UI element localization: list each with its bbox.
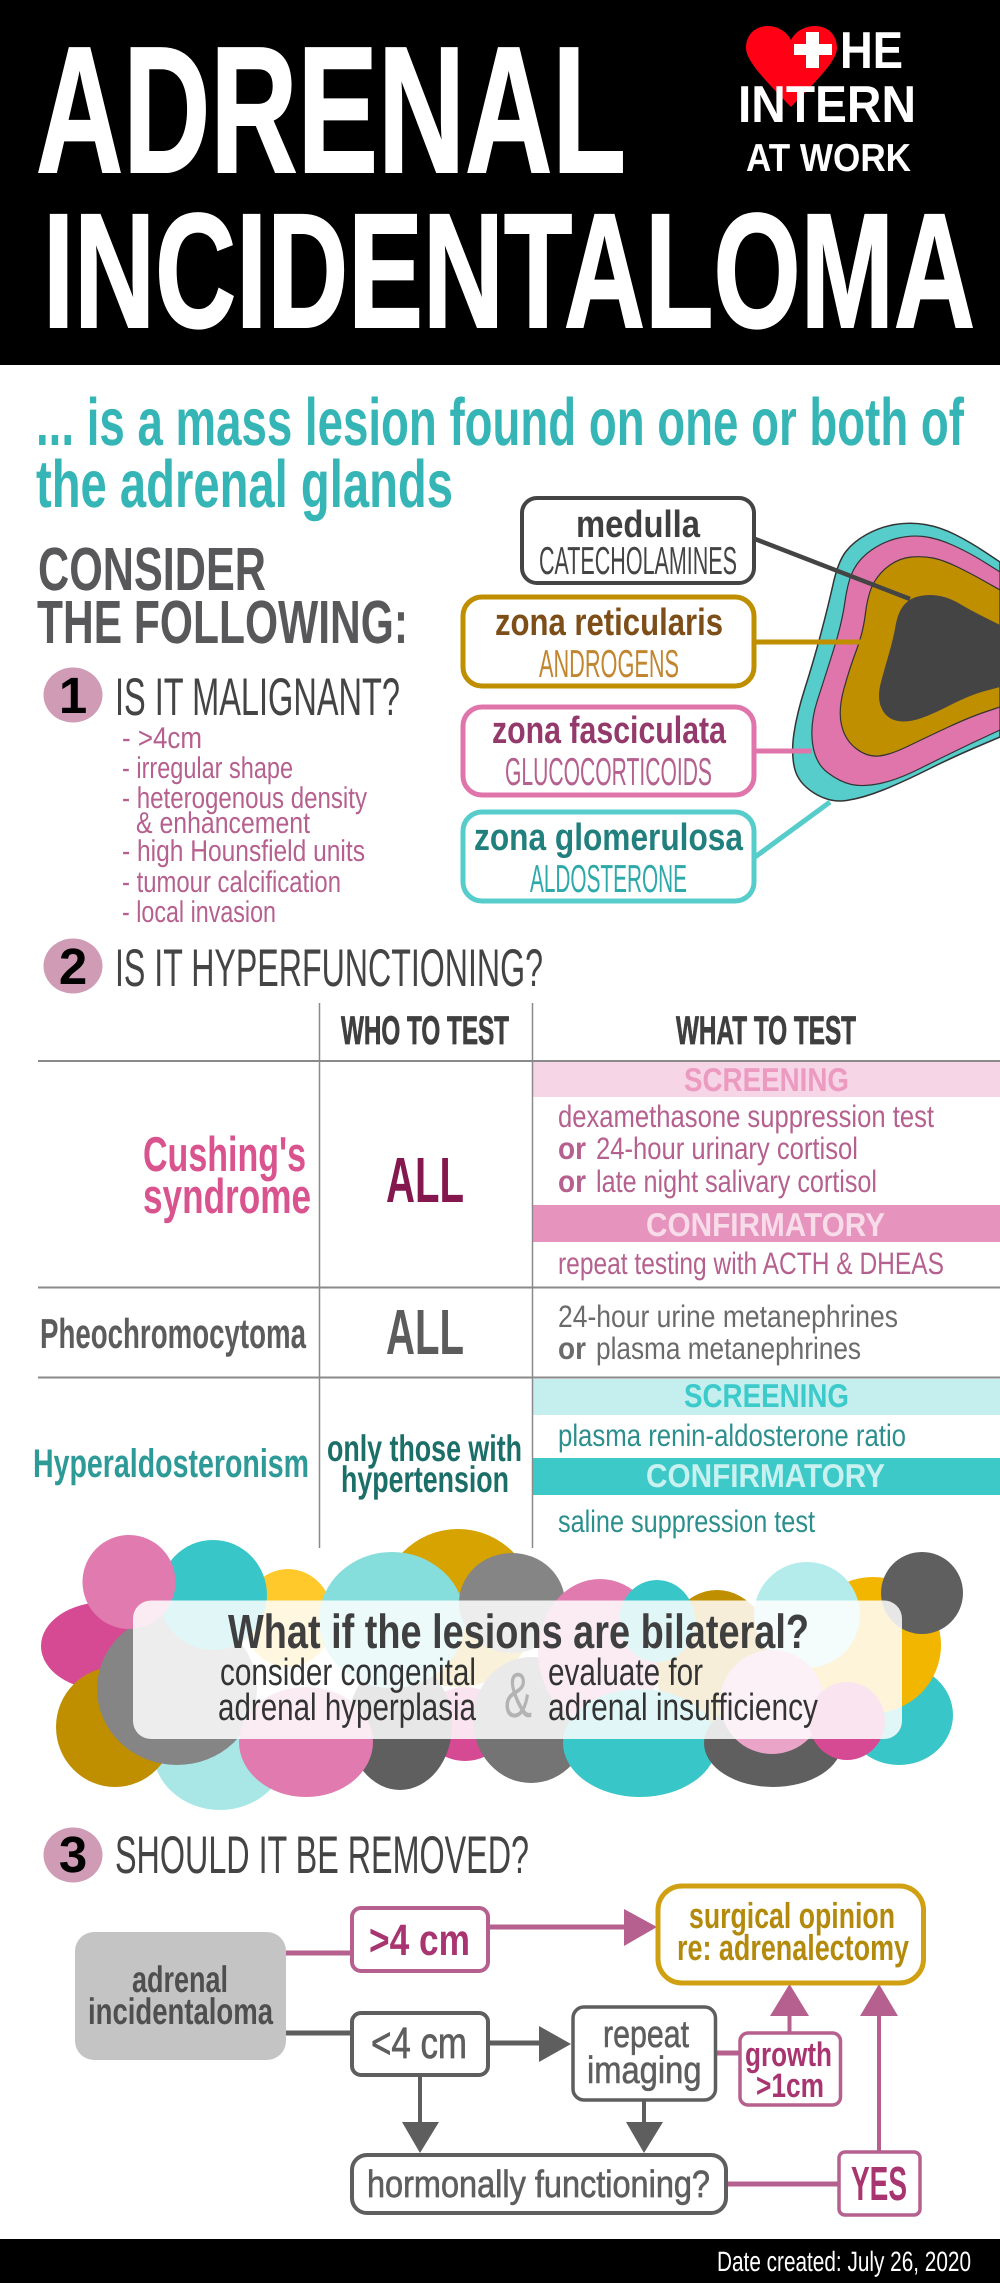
callout: zona glomerulosa: zona glomerulosa	[474, 817, 744, 859]
column headers: WHO TO TEST	[341, 1009, 509, 1053]
row: hyperaldosteronism: only those with	[327, 1428, 522, 1469]
node: surgical opinion	[658, 1886, 924, 1983]
node: greater than 4 cm	[352, 1908, 488, 1971]
node: hormonally functioning	[352, 2155, 726, 2213]
row: cushing's syndrome: or	[558, 1131, 586, 1166]
node: adrenal incidentaloma	[75, 1932, 286, 2060]
section 1: is it malignant	[44, 667, 400, 929]
node: greater than 4 cm: >4 cm	[369, 1916, 470, 1965]
malignancy criteria list: - high Hounsfield units	[122, 835, 365, 868]
logo: the intern at work	[738, 22, 916, 180]
row: hyperaldosteronism: hypertension	[341, 1459, 509, 1500]
logo: the intern at work: INTERN	[738, 76, 916, 134]
callout: zona fasciculata	[463, 707, 812, 795]
section 2 heading: is it hyperfunctioning: 2	[59, 938, 87, 995]
bilateral advice: &	[504, 1659, 532, 1731]
row: cushing's syndrome: CONFIRMATORY	[646, 1206, 885, 1243]
heading: consider the following: CONSIDER	[38, 535, 266, 603]
section 3 heading: should it be removed: 3	[59, 1826, 87, 1883]
section 2 heading: is it hyperfunctioning	[44, 938, 543, 998]
node: repeat imaging	[573, 2007, 716, 2100]
malignancy criteria list: - irregular shape	[122, 752, 293, 785]
callout: zona glomerulosa: ALDOSTERONE	[530, 858, 687, 901]
row: cushing's syndrome: or	[558, 1164, 586, 1199]
callout: medulla: medulla	[576, 504, 701, 546]
row: hyperaldosteronism: plasma renin-aldosterone ratio	[558, 1418, 906, 1453]
node: growth greater than 1 cm: growth	[745, 2036, 832, 2074]
malignancy criteria list: - heterogenous density	[122, 782, 367, 815]
row: cushing's syndrome: Cushing's	[143, 1128, 306, 1182]
node: surgical opinion: surgical opinion	[689, 1895, 895, 1936]
row: hyperaldosteronism	[33, 1377, 906, 1539]
section 3 heading: should it be removed	[44, 1826, 529, 1885]
row: cushing's syndrome: 24-hour urinary cortisol	[596, 1131, 858, 1166]
node: yes	[839, 2152, 920, 2215]
header band	[0, 0, 1000, 365]
subtitle definition: the adrenal glands	[36, 447, 453, 522]
malignancy criteria list	[122, 722, 367, 929]
footer band	[0, 2239, 1000, 2283]
callout: zona reticularis: zona reticularis	[495, 602, 723, 644]
malignancy criteria list: - >4cm	[122, 722, 202, 755]
bilateral advice: adrenal hyperplasia	[218, 1687, 477, 1729]
malignancy criteria list: & enhancement	[136, 807, 311, 840]
panel: bilateral lesions	[133, 1600, 902, 1739]
row: cushing's syndrome	[143, 1061, 944, 1281]
row: pheochromocytoma: plasma metanephrines	[596, 1331, 861, 1366]
callout: medulla: CATECHOLAMINES	[539, 540, 737, 583]
section 2 heading: is it hyperfunctioning: IS IT HYPERFUNCTIONING?	[115, 939, 543, 998]
row: pheochromocytoma: ALL	[386, 1296, 464, 1368]
adrenal gland diagram	[793, 523, 1000, 801]
row: pheochromocytoma	[40, 1296, 898, 1368]
bilateral advice: consider congenital	[220, 1652, 476, 1694]
malignancy criteria list: - tumour calcification	[122, 866, 341, 899]
row: cushing's syndrome: SCREENING	[684, 1061, 849, 1098]
node: adrenal incidentaloma: adrenal	[132, 1959, 228, 2000]
node: repeat imaging: repeat	[603, 2014, 689, 2056]
node: yes: YES	[851, 2158, 907, 2211]
node: growth greater than 1 cm	[740, 2033, 840, 2105]
node: less than 4 cm: <4 cm	[371, 2019, 467, 2068]
bubble cluster background	[41, 1529, 963, 1810]
node: repeat imaging: imaging	[587, 2050, 702, 2092]
column headers: WHAT TO TEST	[676, 1009, 856, 1053]
row: pheochromocytoma: Pheochromocytoma	[40, 1310, 306, 1357]
heading: consider the following	[37, 535, 408, 656]
callout: zona fasciculata: zona fasciculata	[492, 710, 727, 752]
row: pheochromocytoma: 24-hour urine metanephrines	[558, 1299, 898, 1334]
bilateral advice: adrenal insufficiency	[548, 1687, 818, 1729]
bilateral advice: evaluate for	[548, 1652, 703, 1694]
row: cushing's syndrome: late night salivary cortisol	[596, 1164, 877, 1199]
node: growth greater than 1 cm: >1cm	[756, 2067, 824, 2105]
malignancy criteria list: - local invasion	[122, 896, 276, 929]
callout: zona glomerulosa	[463, 802, 830, 901]
row: hyperaldosteronism: CONFIRMATORY	[646, 1457, 885, 1494]
hyperfunction table	[33, 1003, 1000, 1548]
logo: the intern at work: AT WORK	[746, 137, 911, 180]
section 1: is it malignant: 1	[59, 667, 87, 724]
node: less than 4 cm	[352, 2013, 488, 2075]
heading: consider the following: THE FOLLOWING:	[37, 588, 408, 656]
row: cushing's syndrome: dexamethasone suppression test	[558, 1099, 934, 1134]
node: adrenal incidentaloma: incidentaloma	[88, 1991, 273, 2032]
title: ADRENAL	[36, 10, 626, 211]
bilateral advice	[218, 1652, 818, 1731]
subtitle definition	[36, 385, 964, 522]
flowchart	[75, 1886, 924, 2215]
section 3 heading: should it be removed: SHOULD IT BE REMOVED?	[115, 1826, 529, 1885]
section 1: is it malignant: IS IT MALIGNANT?	[115, 668, 400, 727]
callout: medulla	[522, 498, 910, 599]
node: surgical opinion: re: adrenalectomy	[677, 1927, 909, 1968]
node: hormonally functioning: hormonally functioning?	[367, 2164, 710, 2206]
row: pheochromocytoma: or	[558, 1331, 586, 1366]
column headers	[341, 1009, 856, 1053]
connectors and arrows	[286, 1909, 898, 2184]
row: cushing's syndrome: syndrome	[143, 1170, 311, 1224]
logo: the intern at work: HE	[840, 22, 903, 80]
callout: zona fasciculata: GLUCOCORTICOIDS	[505, 751, 712, 794]
row: hyperaldosteronism: SCREENING	[684, 1377, 849, 1414]
row: hyperaldosteronism: Hyperaldosteronism	[33, 1442, 309, 1486]
callout: zona reticularis	[463, 597, 862, 686]
row: cushing's syndrome: ALL	[386, 1144, 464, 1216]
bilateral heading: What if the lesions are bilateral?	[228, 1606, 809, 1659]
row: hyperaldosteronism: saline suppression test	[558, 1504, 815, 1539]
callout: zona reticularis: ANDROGENS	[539, 643, 679, 686]
title	[36, 10, 975, 362]
